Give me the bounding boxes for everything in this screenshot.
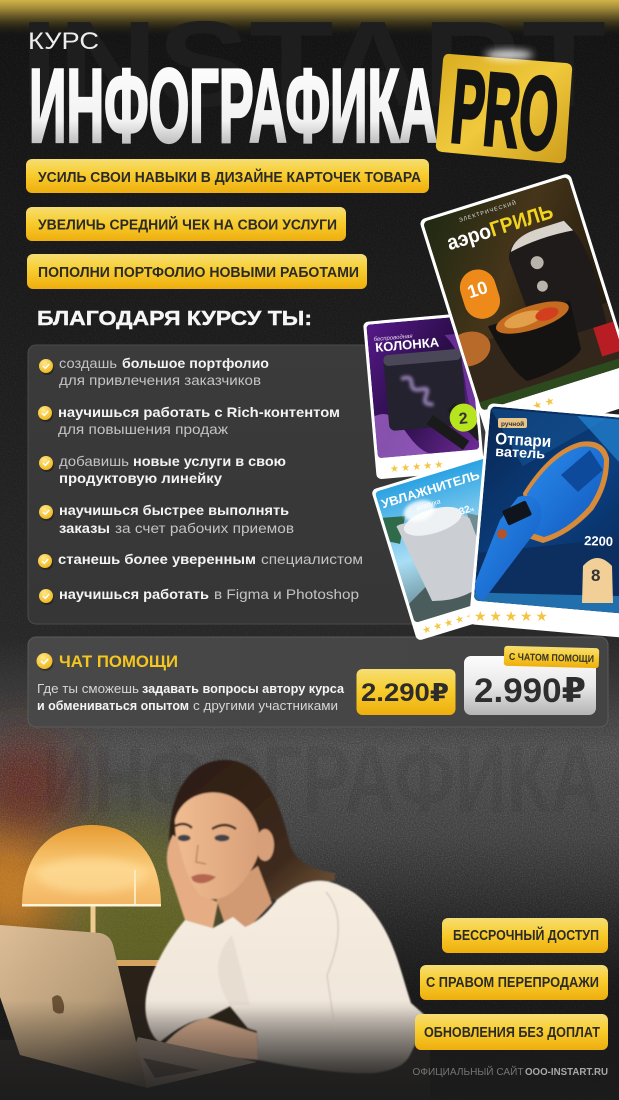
rating stars: ★★★★★ [494,394,559,425]
card labels: ручной [501,420,524,428]
label: КУРС: КУРС [28,28,99,55]
photo: lamp [22,825,170,1056]
icon: check [36,653,54,671]
photo: woman [145,760,428,1073]
item 5 [38,551,363,570]
ear [256,829,274,861]
icon: apple logo [52,995,64,1014]
chat description: Где ты сможешь [37,681,139,696]
chat description [37,681,345,713]
heading: ЧАТ ПОМОЩИ: ЧАТ ПОМОЩИ [59,653,178,671]
item 2: для повышения продаж [58,421,229,437]
heading: БЛАГОДАРЯ КУРСУ ТЫ: БЛАГОДАРЯ КУРСУ ТЫ: [37,308,312,330]
benefit pill 3: ПОПОЛНИ ПОРТФОЛИО НОВЫМИ РАБОТАМИ [38,265,359,281]
feature pill: бессрочный доступ: БЕССРОЧНЫЙ ДОСТУП [453,926,599,944]
item 3: добавишь [59,453,129,469]
feature pill: обновления без доплат [415,1014,608,1050]
card: увлажнитель [372,456,484,640]
dark gap under arm [195,1000,262,1036]
tag: с чатом помощи: С ЧАТОМ ПОМОЩИ [509,652,594,665]
price: 2.290 [356,669,456,715]
footer: official site: OOO-INSTART.RU [525,1067,608,1078]
item 5: специалистом [261,551,363,567]
item 1: для привлечения заказчиков [59,372,261,388]
footer: official site [412,1065,608,1078]
item 4: научишься быстрее выполнять [59,502,289,518]
item 1: создашь [59,355,117,371]
hand on cheek [167,835,218,928]
card labels: 2200 [584,533,613,549]
neck [215,866,272,932]
card image: air fryer [424,178,619,410]
card image: humidifier: УВЛАЖНИТЕЛЬ [380,468,481,511]
item 3: новые услуги в свою [133,453,286,469]
card image: humidifier: воздуха [415,497,442,512]
benefit pill 3 [27,254,367,289]
item 2: научишься работать с Rich-контентом [58,404,340,420]
card labels [495,418,613,603]
card image: air fryer: 10 [465,277,490,302]
chat description: задавать вопросы автору курса [142,681,345,696]
card image: speaker [366,316,483,458]
price: 2.990 [464,656,596,715]
item 6: научишься работать [59,586,209,602]
footer: official site: ОФИЦИАЛЬНЫЙ САЙТ [412,1065,524,1078]
card: колонка [363,313,484,479]
hair [169,760,335,902]
item 1: большое портфолио [122,355,269,371]
benefit pill 1 [26,159,429,193]
feature pill: с правом перепродажи: С ПРАВОМ ПЕРЕПРОДАЖИ [426,975,599,991]
card image: speaker: КОЛОНКА [375,334,440,355]
card labels: Отпари [495,430,552,451]
card image: air fryer: ГРИЛЬ [487,200,556,242]
card labels: ватель [495,443,546,462]
benefit pill 2 [26,207,346,241]
item 4: заказы [59,520,110,536]
feature pill: с правом перепродажи [420,965,608,1000]
benefit pill 1: УСИЛЬ СВОИ НАВЫКИ В ДИЗАЙНЕ КАРТОЧЕК ТОВАРА [38,168,422,186]
panel: course outcomes [28,345,608,624]
card image: steamer background [474,406,619,614]
card labels: 8 [591,566,600,585]
price: 2.290: 2.290₽ [361,679,449,707]
lips [191,874,216,883]
item 2 [38,404,340,437]
hand on laptop [160,1018,258,1060]
steamer device [475,441,609,601]
benefit pill 2: УВЕЛИЧЬ СРЕДНИЙ ЧЕК НА СВОИ УСЛУГИ [38,216,337,234]
photo: laptop [0,925,257,1088]
tag: с чатом помощи [504,646,599,668]
card image: air fryer: ЭЛЕКТРИЧЕСКИЙ [458,198,518,224]
chat description: и обмениваться опытом [37,698,189,713]
card image: air fryer: аэро [444,220,494,255]
sweater [145,881,428,1073]
background watermark: INSTART: INSTART [20,0,606,132]
item 6 [39,586,359,605]
badge: PRO [436,48,572,172]
eyes and brows [175,824,236,864]
item 3 [39,453,286,486]
item 4 [39,502,294,536]
floor fade [0,1000,619,1100]
rating stars: ★★★★★ [474,608,551,624]
card: аэрогриль [420,174,619,432]
face [175,792,260,899]
item 3: продуктовую линейку [59,470,222,486]
card: отпариватель [469,403,619,639]
item 4: за счет рабочих приемов [115,520,294,536]
card image: humidifier [376,459,484,622]
card image: speaker: беспроводная [373,334,414,343]
item 1 [39,355,269,388]
card image: speaker: 2 [458,410,469,428]
rating stars: ★★★★★ [389,459,446,475]
panel: chat help [28,637,608,727]
item 6: в Figma и Photoshop [214,586,359,602]
price: 2.990: 2.990₽ [474,672,586,710]
rating stars: ★★★★★ [421,610,479,637]
chat description: с другими участниками [193,698,338,713]
item 5: станешь более уверенным [58,551,256,567]
feature pill: бессрочный доступ [442,918,608,953]
card image: humidifier: 32ч [458,503,476,518]
